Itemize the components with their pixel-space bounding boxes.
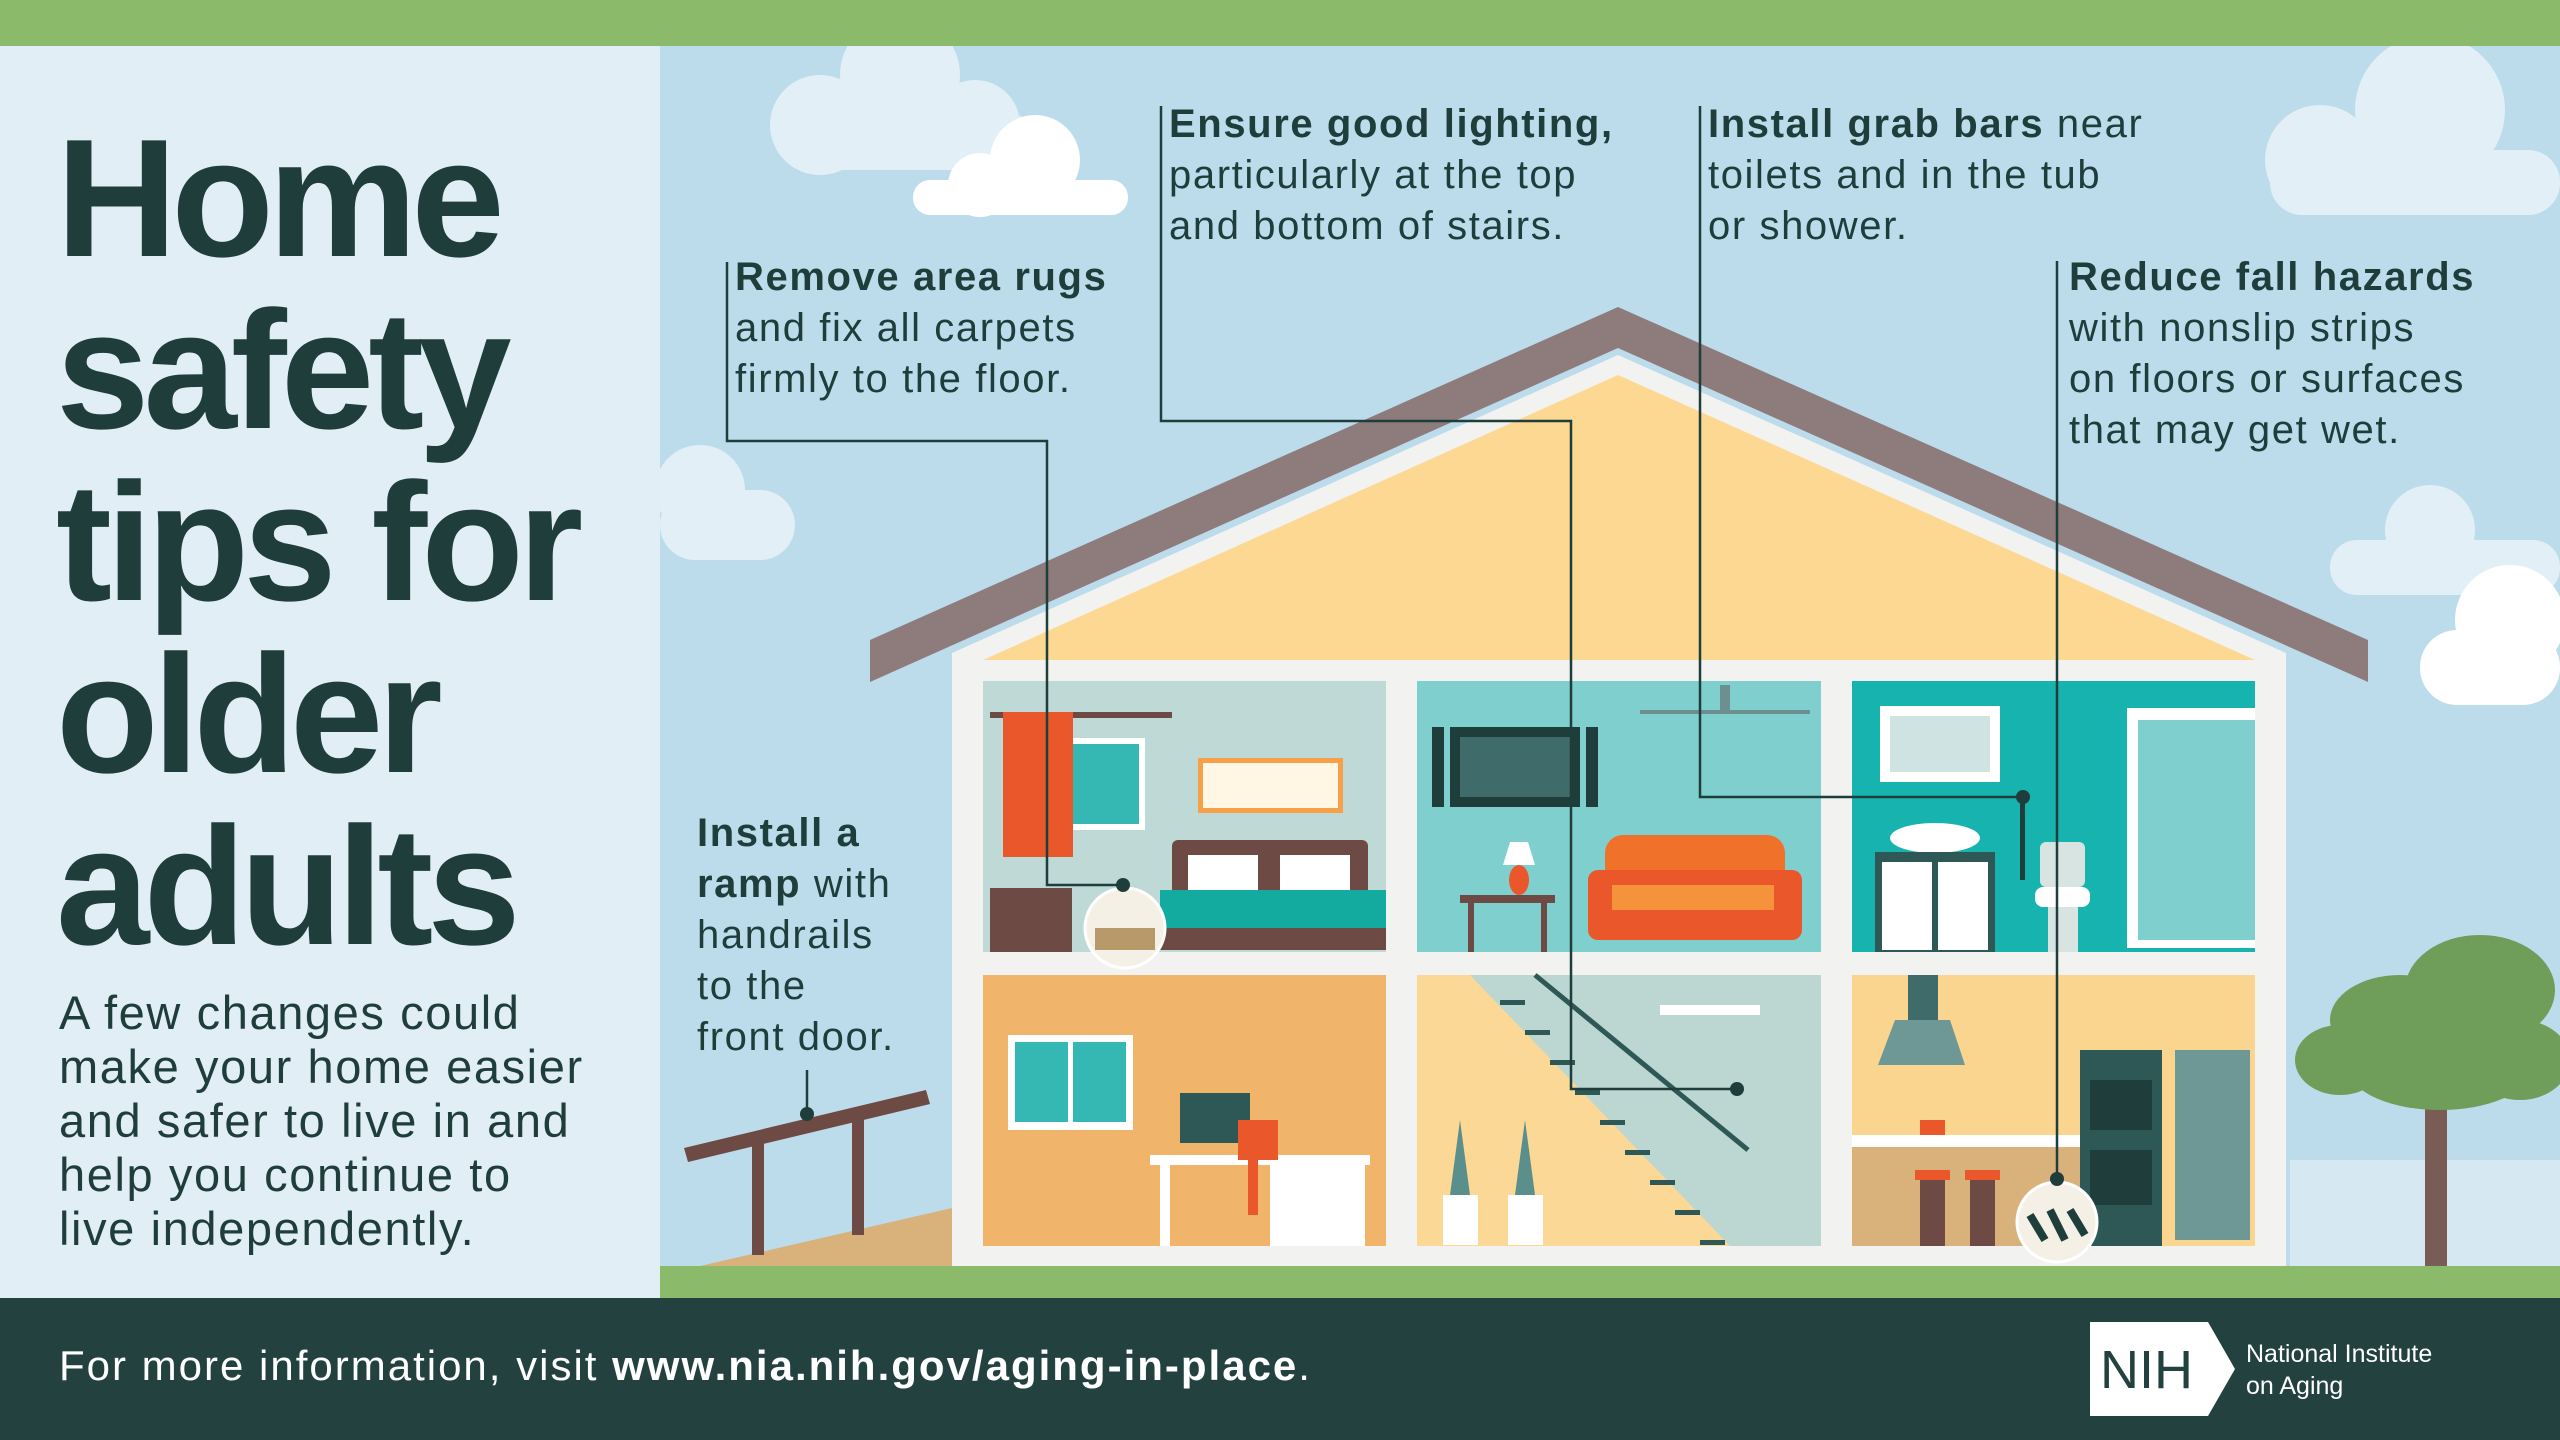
ground strip	[660, 1266, 2560, 1298]
leader lines	[727, 106, 2057, 1179]
NIH logo: on Aging	[2246, 1372, 2343, 1400]
tip: grab bars: Install grab bars near	[1708, 102, 2143, 146]
clouds	[655, 15, 2560, 595]
intro paragraph	[59, 986, 584, 1255]
fence	[2290, 1160, 2560, 1266]
ground slope for ramp	[700, 1208, 952, 1266]
tip: fall hazards: Reduce fall hazards	[2069, 255, 2475, 299]
tip: grab bars: or shower.	[1708, 204, 1909, 248]
tip: ramp: handrails	[697, 913, 874, 957]
tip: fall hazards	[2069, 255, 2475, 452]
tip: rugs: and fix all carpets	[735, 306, 1077, 350]
tip: ramp: ramp with	[697, 862, 891, 906]
footer text: For more information, visit www.nia.nih.gov/aging-in-place.	[59, 1342, 1312, 1389]
house roof and walls	[870, 307, 2368, 682]
stairs room	[1500, 1000, 1725, 1245]
NIH logo: National Institute	[2246, 1340, 2432, 1368]
tip: fall hazards: with nonslip strips	[2069, 306, 2415, 350]
tip: grab bars: toilets and in the tub	[1708, 153, 2101, 197]
footer	[0, 1298, 2560, 1440]
tip: rugs: firmly to the floor.	[735, 357, 1072, 401]
tip: rugs	[735, 255, 1107, 401]
tip: rugs: Remove area rugs	[735, 255, 1107, 299]
tip: ramp	[697, 811, 895, 1059]
intro paragraph: A few changes could	[59, 986, 521, 1039]
ramp railing	[684, 1090, 930, 1255]
rooms	[983, 681, 1386, 952]
bedroom	[990, 712, 1172, 718]
left panel	[0, 46, 660, 1298]
intro paragraph: and safer to live in and	[59, 1094, 570, 1147]
top green bar	[0, 0, 2560, 46]
tip: lighting: particularly at the top	[1169, 153, 1577, 197]
kitchen	[1908, 975, 1938, 1020]
bathroom	[1880, 706, 2000, 782]
tip: lighting: and bottom of stairs.	[1169, 204, 1565, 248]
title: Home safety tips for older adults	[56, 104, 577, 980]
intro paragraph: live independently.	[59, 1202, 475, 1255]
intro paragraph: make your home easier	[59, 1040, 584, 1093]
tip: grab bars	[1708, 102, 2143, 248]
office	[1008, 1035, 1133, 1130]
tip: ramp: to the	[697, 964, 807, 1008]
tip: fall hazards: on floors or surfaces	[2069, 357, 2465, 401]
NIH logo	[2090, 1322, 2432, 1416]
tip: ramp: front door.	[697, 1015, 895, 1059]
NIH logo: NIH	[2100, 1340, 2193, 1400]
tip: ramp: Install a	[697, 811, 860, 855]
tip: lighting	[1169, 102, 1614, 248]
living	[1450, 727, 1580, 807]
tree	[2295, 935, 2560, 1266]
tip: fall hazards: that may get wet.	[2069, 408, 2401, 452]
tip: lighting: Ensure good lighting,	[1169, 102, 1614, 146]
intro paragraph: help you continue to	[59, 1148, 512, 1201]
